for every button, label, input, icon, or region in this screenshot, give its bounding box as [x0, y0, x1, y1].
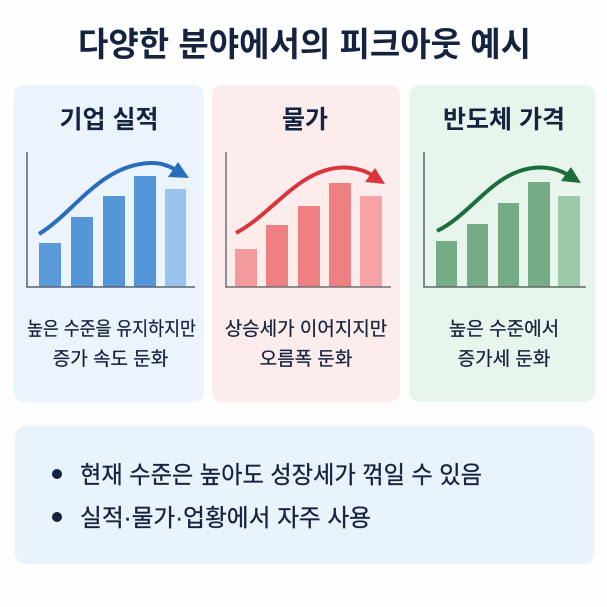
panel: summary — [15, 426, 594, 564]
title: 다양한 분야에서의 피크아웃 예시 — [78, 27, 531, 64]
bar chart: 반도체 가격 — [424, 152, 586, 287]
arrow: 물가 trend — [236, 167, 385, 233]
bullet 1: 현재 수준은 높아도 성장세가 꺾일 수 있음 — [80, 462, 482, 489]
bar chart: 기업 실적 — [27, 152, 195, 287]
arrow: 기업 실적 trend — [39, 162, 189, 234]
heading: 반도체 가격: 반도체 가격 — [443, 106, 565, 134]
text: 기업 실적 description: 높은 수준을 유지하지만 — [27, 318, 196, 340]
text: 기업 실적 description: 증가 속도 둔화 — [53, 348, 168, 370]
panel: 물가 — [212, 85, 400, 402]
heading: 기업 실적: 기업 실적 — [60, 106, 158, 134]
text: 물가 description: 상승세가 이어지지만 — [225, 318, 387, 340]
heading: 물가: 물가 — [282, 106, 328, 134]
panel: 반도체 가격 — [409, 85, 595, 402]
bar chart: 물가 — [226, 152, 391, 287]
text: 반도체 가격 description: 증가세 둔화 — [458, 348, 550, 370]
arrow: 반도체 가격 trend — [437, 167, 581, 231]
bullet 2: 실적·물가·업황에서 자주 사용 — [80, 505, 371, 532]
text: 반도체 가격 description: 높은 수준에서 — [449, 318, 559, 340]
text: 물가 description: 오름폭 둔화 — [260, 348, 352, 370]
panel: 기업 실적 — [14, 85, 204, 402]
